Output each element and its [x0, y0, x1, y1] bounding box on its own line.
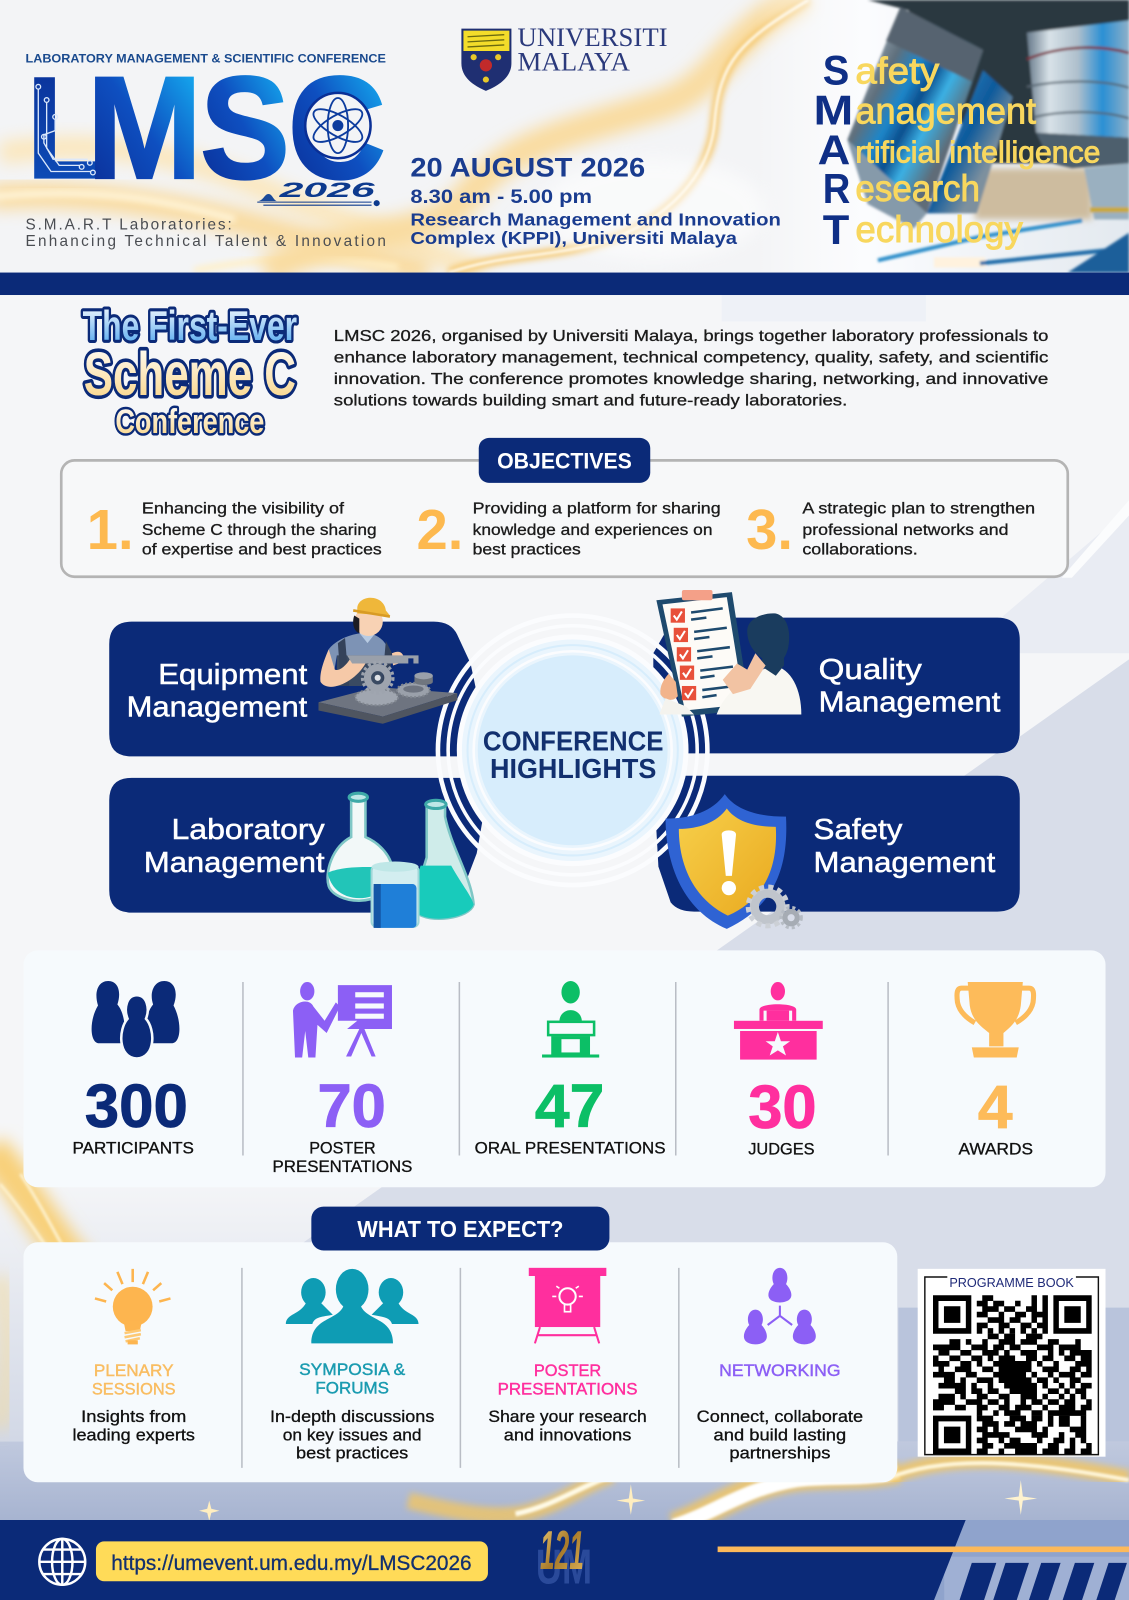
card labels: Equipment	[158, 659, 307, 691]
item: poster presentations	[488, 1268, 647, 1444]
item: networking: and build lasting	[714, 1426, 846, 1444]
card: safety management	[653, 776, 1020, 912]
Universiti Malaya logo: MALAYA	[518, 46, 630, 76]
icon: safety shield with gears	[666, 794, 801, 929]
card labels: Laboratory	[171, 814, 325, 846]
The First-Ever Scheme C Conference badge: The First-Ever	[83, 302, 297, 349]
header background with gold waves and microscope	[0, 0, 1129, 273]
tagline	[26, 217, 386, 250]
stat: oral presentations: ORAL PRESENTATIONS	[475, 1140, 666, 1158]
event date, time and venue: Research Management and Innovation	[410, 210, 781, 230]
stat: participants: PARTICIPANTS	[72, 1140, 194, 1158]
item: poster presentations: Share your research	[488, 1408, 647, 1426]
objective 3: A strategic plan to strengthen	[802, 500, 1035, 517]
card labels: Safety	[814, 814, 903, 846]
objective 2: best practices	[473, 541, 581, 558]
icon: globe	[39, 1539, 85, 1585]
footer band	[0, 1520, 1129, 1600]
expect heading tab: WHAT TO EXPECT?	[357, 1216, 563, 1242]
stat: judges: 30	[748, 1073, 817, 1141]
item: networking: partnerships	[729, 1445, 830, 1463]
objective 1	[87, 498, 382, 561]
item: symposia and forums: FORUMS	[315, 1379, 389, 1397]
stat: participants	[72, 981, 194, 1158]
stat: judges: JUDGES	[748, 1141, 815, 1159]
The First-Ever Scheme C Conference badge	[83, 302, 297, 441]
logo year 2026: 2026	[278, 178, 377, 202]
Universiti Malaya logo: UNIVERSITI	[518, 22, 668, 52]
QR code: programme book	[918, 1269, 1106, 1457]
The First-Ever Scheme C Conference badge: Scheme C	[84, 340, 296, 408]
SMART acronym: esearch	[855, 168, 980, 209]
objectives heading	[479, 438, 650, 483]
item: networking: NETWORKING	[719, 1362, 841, 1380]
SMART acronym: M	[814, 87, 853, 134]
centre disc	[478, 655, 668, 845]
item: plenary sessions: PLENARY	[94, 1362, 174, 1380]
Universiti Malaya logo	[461, 22, 668, 91]
icon: three people	[286, 1269, 419, 1343]
item: poster presentations: and innovations	[504, 1426, 631, 1444]
icon: laboratory flasks	[328, 793, 474, 928]
centre heading	[483, 725, 664, 784]
card labels: Quality	[819, 654, 923, 686]
icon: people group	[92, 981, 179, 1059]
stat: poster presentations: 70	[317, 1072, 386, 1140]
decorative slanted bars	[960, 1563, 1127, 1600]
stat: awards	[957, 982, 1034, 1159]
objective 1: Enhancing the visibility of	[142, 500, 345, 517]
card labels: Management	[144, 847, 325, 879]
SMART acronym: S	[823, 47, 849, 94]
website link	[96, 1541, 488, 1581]
icon: judge at desk	[734, 982, 823, 1060]
conference name line: LABORATORY MANAGEMENT & SCIENTIFIC CONFERENCE	[26, 52, 386, 65]
stat: poster presentations: POSTER	[309, 1140, 376, 1158]
item: symposia and forums: SYMPOSIA &	[299, 1361, 405, 1379]
card: quality management	[653, 618, 1020, 753]
LMSC logo	[26, 46, 386, 209]
intro paragraph	[334, 328, 1049, 409]
logo: 121 UM: 121	[540, 1519, 584, 1581]
icon: poster board	[529, 1268, 606, 1343]
stat: judges	[734, 982, 823, 1159]
stat: awards: 4	[978, 1073, 1013, 1141]
centre heading: HIGHLIGHTS	[490, 753, 656, 784]
SMART acronym: echnology	[855, 209, 1023, 250]
item: symposia and forums: In-depth discussions	[270, 1408, 434, 1426]
intro paragraph: innovation. The conference promotes knowledge sharing, networking, and innovative	[334, 371, 1049, 388]
objective 1: 1.	[87, 498, 134, 561]
tagline: S.M.A.R.T Laboratories:	[26, 217, 232, 234]
SMART acronym: anagement	[855, 91, 1036, 132]
QR modules	[933, 1298, 1092, 1451]
item: poster presentations: POSTER	[534, 1362, 601, 1380]
objective 3: professional networks and	[802, 522, 1009, 539]
panel: key figures	[23, 950, 1106, 1187]
logo: 121 UM: UM	[536, 1540, 592, 1594]
item: plenary sessions: SESSIONS	[92, 1380, 176, 1398]
icon: light bulb	[95, 1269, 170, 1344]
icon: speaker at podium	[542, 981, 599, 1058]
stat: participants: 300	[85, 1072, 188, 1140]
card labels: Management	[127, 692, 307, 724]
icon: engineer with gears	[318, 598, 457, 724]
card: equipment management	[109, 622, 490, 756]
intro paragraph: solutions towards building smart and future-ready laboratories.	[334, 392, 847, 409]
SMART acronym: R	[823, 165, 850, 212]
objective 3: collaborations.	[802, 541, 918, 558]
SMART acronym: T	[823, 206, 850, 253]
LMSC logo: L	[26, 46, 109, 209]
expect heading tab	[311, 1207, 609, 1250]
LMSC logo: S	[200, 46, 290, 209]
stat: awards: AWARDS	[959, 1141, 1033, 1159]
LMSC logo: M	[87, 46, 202, 209]
stat: poster presentations: PRESENTATIONS	[273, 1158, 413, 1176]
logo year 2026	[257, 178, 380, 206]
icon: trophy	[957, 982, 1034, 1058]
item: plenary sessions: leading experts	[72, 1426, 195, 1444]
objectives heading: OBJECTIVES	[497, 449, 632, 474]
panel: what to expect	[23, 1207, 897, 1482]
SMART acronym: rtificial intelligence	[855, 135, 1100, 169]
objective 3: 3.	[746, 498, 793, 561]
objective 2: knowledge and experiences on	[473, 522, 713, 539]
intro paragraph: LMSC 2026, organised by Universiti Malaya, brings together laboratory professionals to	[334, 328, 1049, 345]
logo: 121 UM	[536, 1519, 592, 1594]
objective 3	[746, 498, 1035, 561]
SMART acronym: afety	[855, 51, 940, 92]
objective 2	[416, 498, 721, 561]
objective 2: Providing a platform for sharing	[473, 500, 721, 517]
atom emblem	[305, 93, 371, 158]
stat: poster presentations	[273, 982, 413, 1176]
item: symposia and forums: on key issues and	[283, 1426, 422, 1444]
item: symposia and forums	[270, 1269, 434, 1463]
centre rings	[438, 616, 707, 885]
page background	[0, 516, 1129, 1520]
objective 1: Scheme C through the sharing	[142, 522, 377, 539]
item: plenary sessions: Insights from	[81, 1408, 186, 1426]
icon: network of people	[744, 1268, 816, 1344]
event date, time and venue: Complex (KPPI), Universiti Malaya	[410, 228, 738, 248]
icon: clipboard with person	[656, 590, 801, 717]
website link: https://umevent.um.edu.my/LMSC2026	[111, 1551, 472, 1575]
item: networking	[697, 1268, 863, 1463]
SMART acronym	[814, 47, 1100, 253]
event date, time and venue: 8.30 am - 5.00 pm	[410, 186, 592, 208]
QR code: programme book: PROGRAMME BOOK	[949, 1275, 1074, 1290]
item: plenary sessions	[72, 1269, 195, 1444]
microscope image area	[755, 0, 1129, 273]
icon: presenter with board	[293, 982, 392, 1058]
objective 1: of expertise and best practices	[142, 541, 382, 558]
centre heading: CONFERENCE	[483, 725, 664, 756]
objective 2: 2.	[416, 498, 463, 561]
card labels: Management	[814, 847, 995, 879]
item: networking: Connect, collaborate	[697, 1408, 863, 1426]
event date, time and venue	[410, 153, 781, 248]
panel: conference highlights	[109, 590, 1020, 929]
panel: objectives	[61, 438, 1068, 577]
item: symposia and forums: best practices	[296, 1445, 408, 1463]
stat: oral presentations	[475, 981, 666, 1158]
tagline: Enhancing Technical Talent & Innovation	[26, 233, 386, 250]
card labels	[127, 654, 1000, 879]
The First-Ever Scheme C Conference badge: Conference	[115, 403, 264, 441]
card labels: Management	[819, 686, 1000, 718]
item: poster presentations: PRESENTATIONS	[498, 1380, 638, 1398]
event date, time and venue: 20 AUGUST 2026	[410, 153, 645, 183]
LMSC logo: C	[288, 46, 386, 209]
stat: oral presentations: 47	[535, 1072, 604, 1140]
navy header band	[0, 273, 1129, 295]
circuit lines on the L	[36, 84, 95, 175]
card: laboratory management	[109, 778, 490, 913]
intro paragraph: enhance laboratory management, technical competency, quality, safety, and scientific	[334, 349, 1048, 366]
SMART acronym: A	[818, 126, 850, 173]
